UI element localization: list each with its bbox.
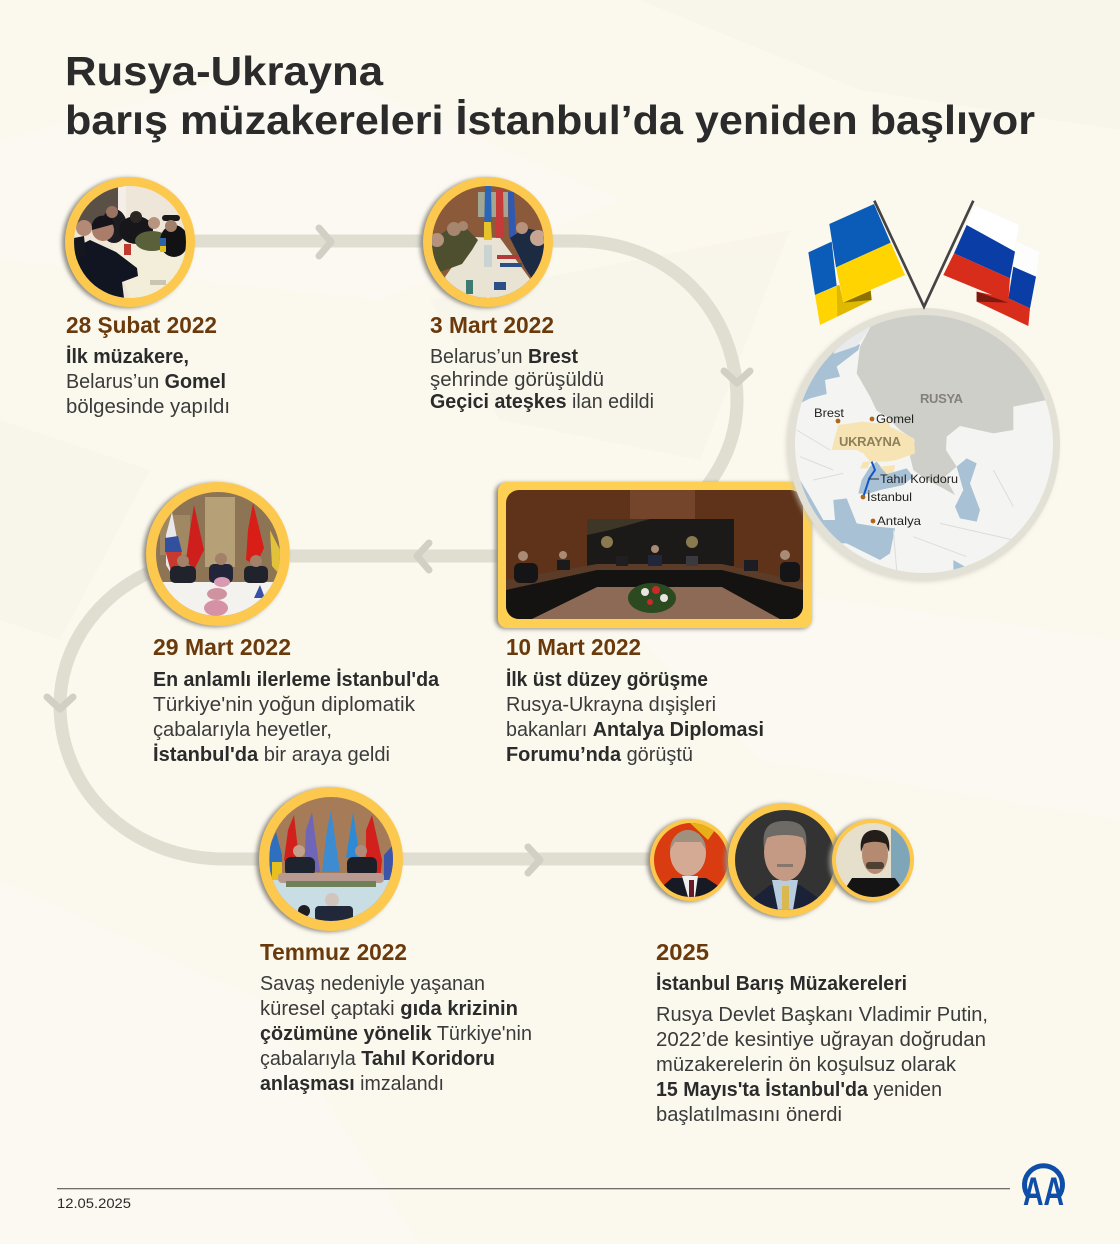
- text: 29 Mart 2022: En anlamlı ilerleme İstanbul'da: [153, 668, 440, 691]
- text: 28 Şubat 2022: İlk müzakere,: [66, 345, 189, 368]
- footer date: 12.05.2025: [57, 1195, 131, 1211]
- date: 10 Mart 2022: 10 Mart 2022: [506, 634, 641, 660]
- text: Temmuz 2022: [260, 973, 532, 1095]
- title: Rusya-Ukrayna: [65, 48, 384, 94]
- arrow: row 1: [319, 228, 331, 256]
- map label: Gomel: Gomel: [876, 412, 914, 426]
- text: 3 Mart 2022: Belarus’un Brest: [430, 346, 578, 368]
- map label: RUSYA: RUSYA: [920, 391, 964, 406]
- footer line: [57, 1188, 1010, 1189]
- photo: 28 Şubat 2022: [62, 177, 195, 308]
- text: 29 Mart 2022: çabalarıyla heyetler,: [153, 719, 332, 741]
- text: 10 Mart 2022: İlk üst düzey görüşme: [506, 668, 708, 691]
- text: 2025: Rusya Devlet Başkanı Vladimir Putin,: [656, 1004, 988, 1026]
- arrow: curve down left: [47, 697, 73, 709]
- date: 3 Mart 2022: 3 Mart 2022: [430, 312, 554, 338]
- text: 29 Mart 2022: [153, 668, 440, 766]
- flag poles: [874, 201, 973, 307]
- text: 2025: 2022’de kesintiye uğrayan doğrudan: [656, 1029, 986, 1051]
- arrow: curve down right: [724, 371, 750, 383]
- text: 10 Mart 2022: [506, 668, 764, 766]
- map label: Brest: Brest: [814, 406, 845, 420]
- text: 2025: müzakerelerin ön koşulsuz olarak: [656, 1054, 957, 1076]
- text: Temmuz 2022: çözümüne yönelik Türkiye'nin: [260, 1023, 532, 1045]
- map label: Antalya: Antalya: [877, 514, 921, 528]
- logo: AA: AA: [1023, 1170, 1064, 1214]
- timeline road: [60, 241, 737, 859]
- text: 10 Mart 2022: bakanları Antalya Diplomasi: [506, 719, 764, 741]
- arrow: row 2: [417, 543, 429, 570]
- map label: UKRAYNA: UKRAYNA: [839, 434, 902, 449]
- map: [786, 307, 1067, 582]
- logo: AA: [1023, 1166, 1064, 1214]
- text: 29 Mart 2022: Türkiye'nin yoğun diplomatik: [153, 694, 416, 716]
- text: Temmuz 2022: anlaşması imzalandı: [260, 1073, 444, 1095]
- date: 29 Mart 2022: 29 Mart 2022: [153, 634, 291, 660]
- date: 2025: 2025: [656, 939, 709, 965]
- text: 28 Şubat 2022: bölgesinde yapıldı: [66, 396, 230, 418]
- text: Temmuz 2022: Savaş nedeniyle yaşanan: [260, 973, 485, 995]
- text: 2025: İstanbul Barış Müzakereleri: [656, 972, 907, 995]
- text: Temmuz 2022: küresel çaptaki gıda krizinin: [260, 998, 518, 1020]
- text: 29 Mart 2022: İstanbul'da bir araya geldi: [153, 743, 390, 766]
- photo: 3 Mart 2022: [420, 177, 553, 308]
- flags: [808, 201, 1039, 326]
- map label: Tahıl Koridoru: Tahıl Koridoru: [880, 472, 958, 486]
- text: 3 Mart 2022: şehrinde görüşüldü: [430, 369, 604, 391]
- map label: İstanbul: İstanbul: [867, 490, 912, 504]
- flag: Ukraine: [808, 204, 905, 325]
- date: 28 Şubat 2022: 28 Şubat 2022: [66, 312, 217, 338]
- route: grain corridor: [863, 462, 875, 497]
- text: 28 Şubat 2022: [66, 345, 230, 418]
- photo: 10 Mart 2022: [495, 482, 812, 629]
- title: barış müzakereleri İstanbul’da yeniden başlıyor: [65, 97, 1035, 143]
- date: Temmuz 2022: Temmuz 2022: [260, 939, 407, 965]
- text: 28 Şubat 2022: Belarus’un Gomel: [66, 371, 226, 393]
- photo: leaders: [647, 803, 914, 918]
- text: 10 Mart 2022: Rusya-Ukrayna dışişleri: [506, 694, 716, 716]
- photo: 29 Mart 2022: [143, 482, 290, 627]
- text: 2025: [656, 972, 988, 1126]
- text: 2025: 15 Mayıs'ta İstanbul'da yeniden: [656, 1078, 942, 1101]
- text: 3 Mart 2022: [430, 346, 654, 413]
- text: Temmuz 2022: çabalarıyla Tahıl Koridoru: [260, 1048, 495, 1070]
- text: 10 Mart 2022: Forumu’nda görüştü: [506, 744, 693, 766]
- photo: Temmuz 2022: [256, 787, 403, 932]
- text: 2025: başlatılmasını önerdi: [656, 1104, 842, 1126]
- arrow: row 3: [528, 847, 540, 873]
- flag: Russia: [943, 205, 1039, 326]
- text: 3 Mart 2022: Geçici ateşkes ilan edildi: [430, 391, 654, 413]
- title: [65, 48, 1035, 143]
